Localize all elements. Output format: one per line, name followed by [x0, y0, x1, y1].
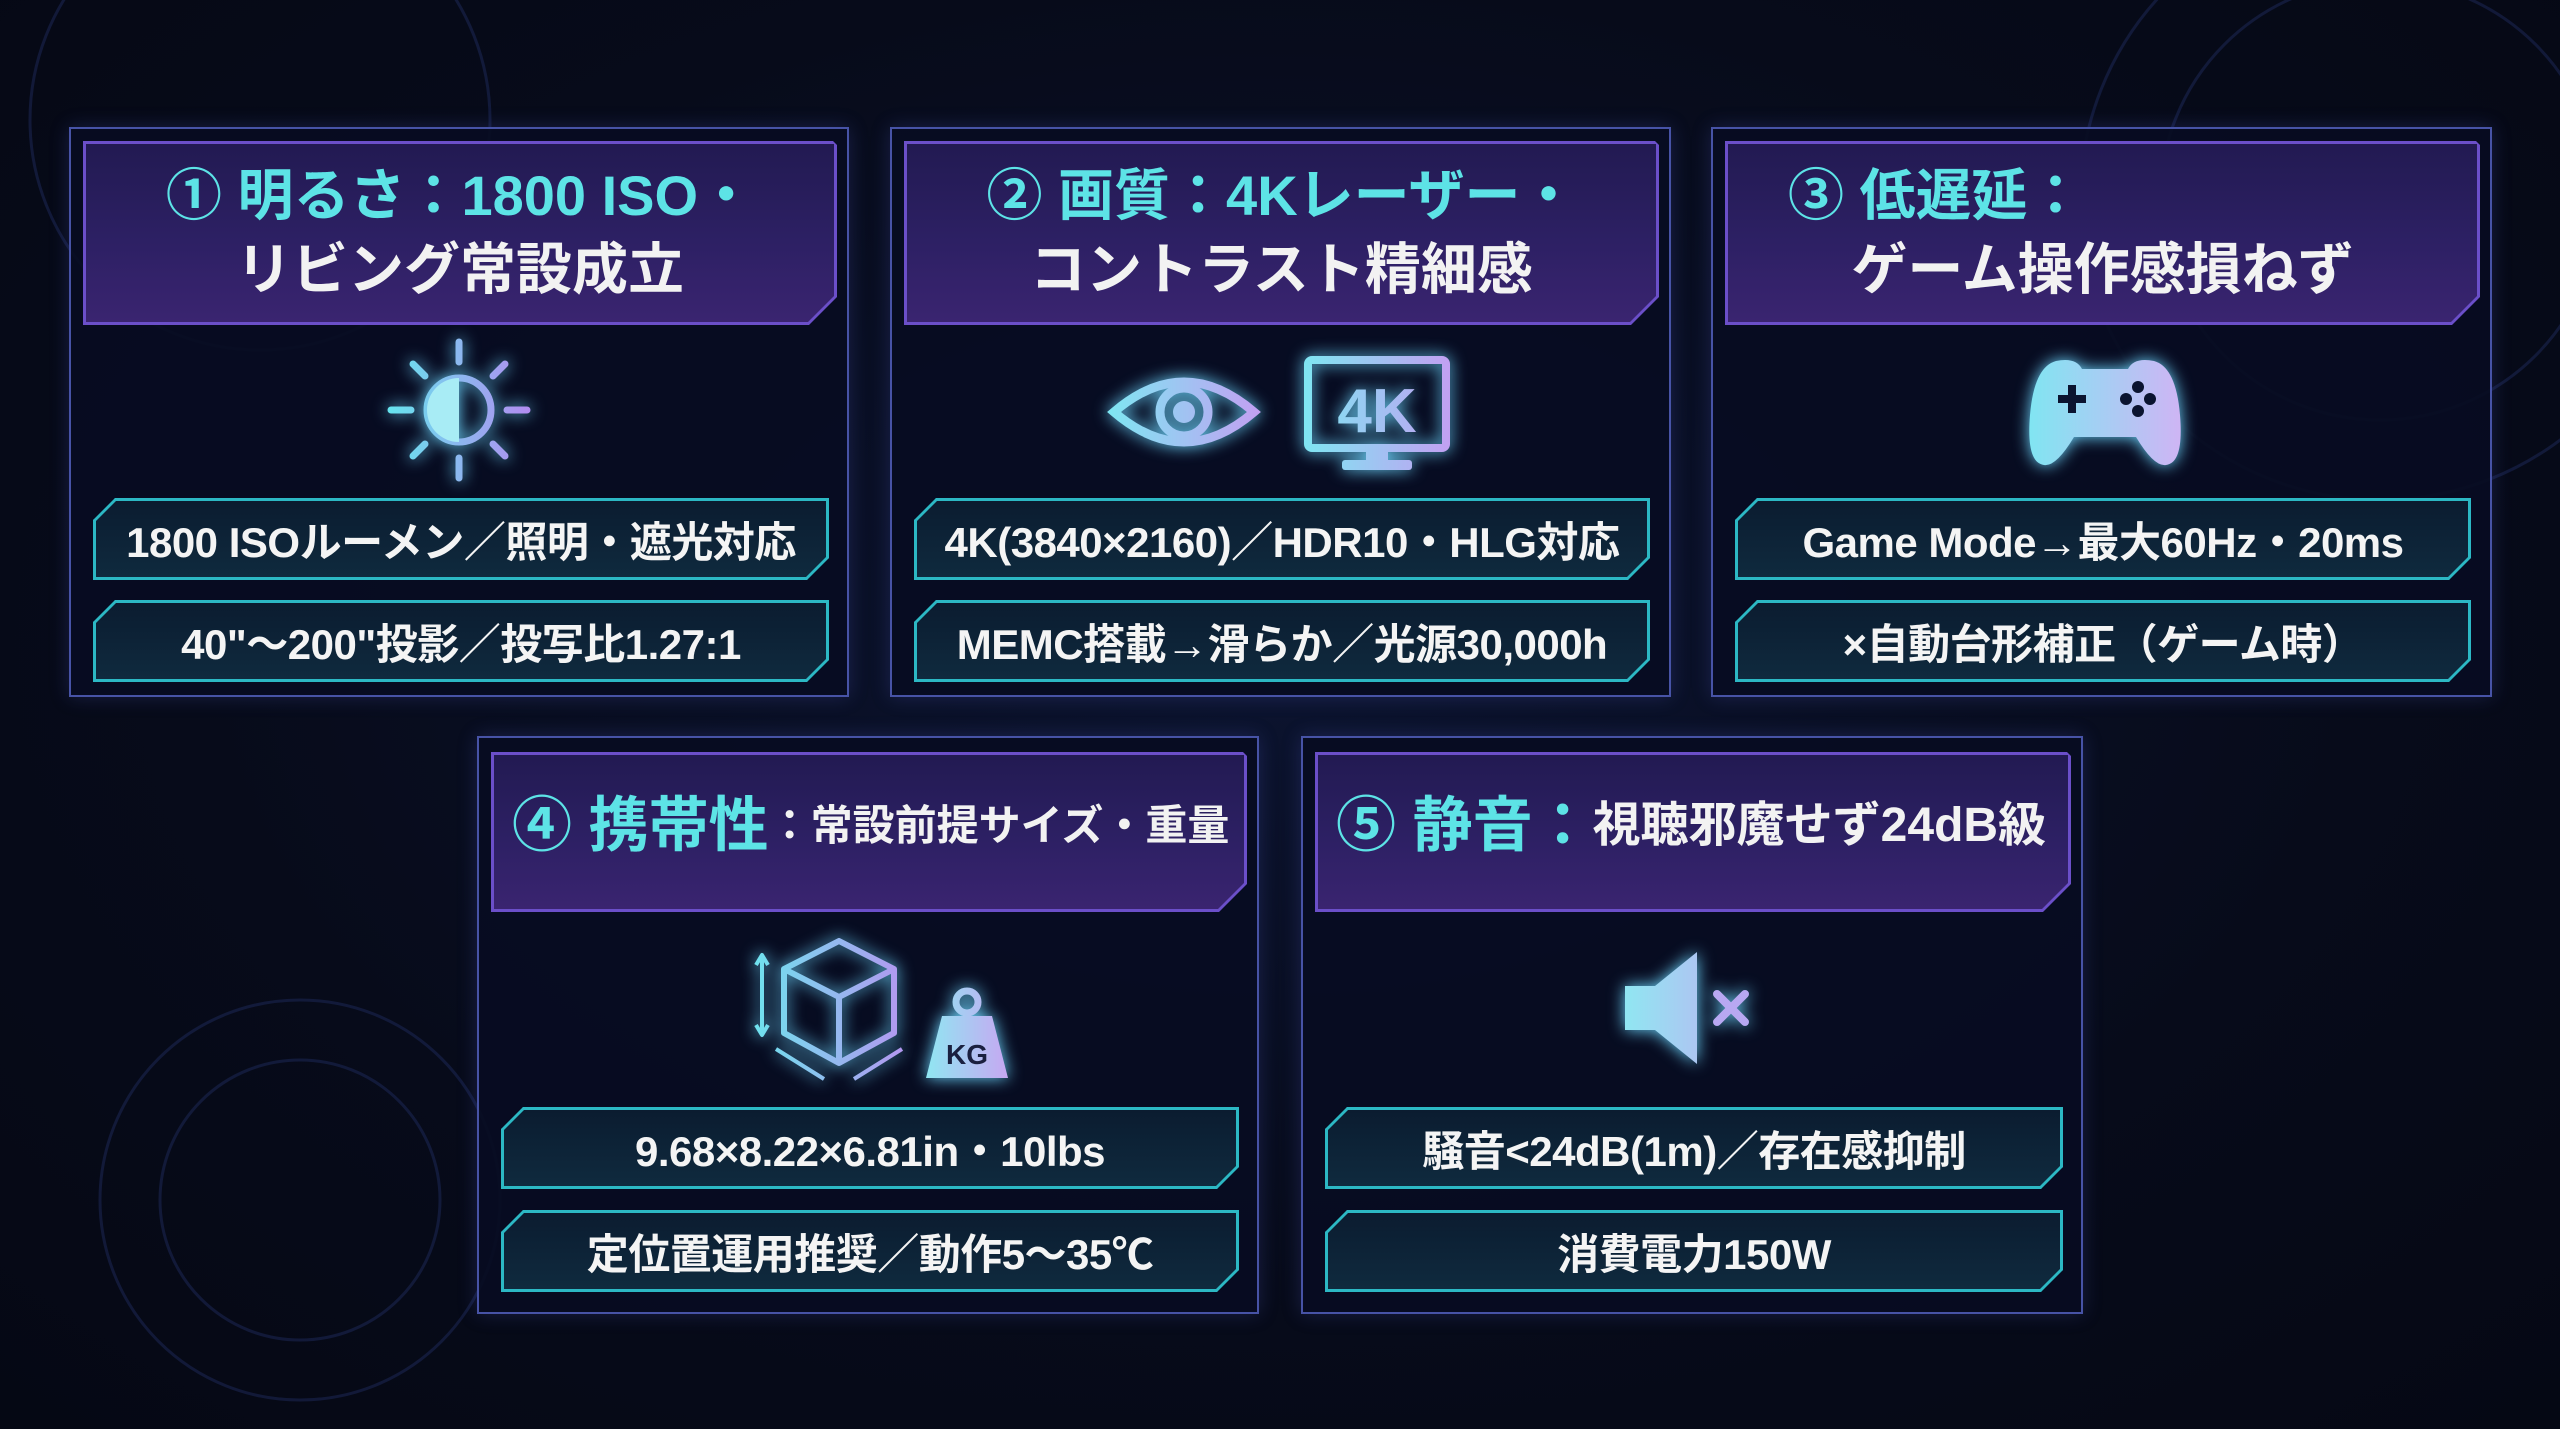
- pill: keystone: ×自動台形補正（ゲーム時）: [1843, 620, 2363, 668]
- heading: picture quality: ② 画質：4Kレーザー・: [986, 164, 1577, 227]
- pill: screen size: 40"～200"投影／投写比1.27:1: [181, 620, 741, 668]
- pill: MEMC: [914, 600, 1650, 682]
- pill: game mode: [1735, 498, 2471, 580]
- heading: picture quality: コントラスト精細感: [1030, 238, 1533, 301]
- pill: operation: [501, 1210, 1239, 1292]
- heading: picture quality: [904, 141, 1659, 325]
- pill: noise: [1325, 1107, 2063, 1189]
- heading: portability: ④ 携帯性: [512, 792, 769, 859]
- pill: lumen: 1800 ISOルーメン／照明・遮光対応: [126, 518, 796, 566]
- pill: screen size: [93, 600, 829, 682]
- panel: quietness: [1301, 736, 2083, 1314]
- heading: brightness: リビング常設成立: [236, 238, 684, 301]
- panel: brightness: [69, 127, 849, 697]
- icon: gamepad: [2016, 348, 2194, 476]
- icon: speaker mute: [1612, 945, 1758, 1071]
- heading: quietness: 視聴邪魔せず24dB級: [1593, 799, 2046, 852]
- icon: 4K monitor: 4K: [1337, 377, 1417, 446]
- heading: quietness: ⑤ 静音：: [1336, 792, 1593, 859]
- pill: game mode: Game Mode→最大60Hz・20ms: [1802, 518, 2404, 566]
- panel: picture quality: [890, 127, 1671, 697]
- pill: operation: 定位置運用推奨／動作5～35℃: [587, 1230, 1153, 1278]
- icon: sun: [379, 330, 539, 490]
- pill: power: 消費電力150W: [1557, 1230, 1831, 1278]
- pill: resolution: 4K(3840×2160)／HDR10・HLG対応: [945, 518, 1619, 566]
- icon: cube with arrows: [745, 928, 910, 1088]
- panel: portability: [477, 736, 1259, 1314]
- heading: latency: [1725, 141, 2480, 325]
- heading: brightness: [83, 141, 837, 325]
- heading: portability: ：常設前提サイズ・重量: [769, 802, 1229, 849]
- pill: noise: 騒音<24dB(1m)／存在感抑制: [1422, 1128, 1966, 1174]
- pill: dimensions: [501, 1107, 1239, 1189]
- heading: quietness: [1315, 752, 2071, 912]
- pill: dimensions: 9.68×8.22×6.81in・10lbs: [635, 1128, 1105, 1174]
- pill: lumen: [93, 498, 829, 580]
- pill: power: [1325, 1210, 2063, 1292]
- pill: keystone: [1735, 600, 2471, 682]
- icon: eye: [1099, 364, 1269, 460]
- heading: brightness: ① 明るさ：1800 ISO・: [166, 164, 754, 227]
- pill: resolution: [914, 498, 1650, 580]
- icon: 4K monitor: [1291, 343, 1463, 483]
- heading: latency: ゲーム操作感損ねず: [1851, 238, 2354, 301]
- pill: MEMC: MEMC搭載→滑らか／光源30,000h: [957, 620, 1607, 668]
- panel: latency: [1711, 127, 2492, 697]
- icon: KG weight: KG: [946, 1039, 988, 1070]
- heading: portability: [491, 752, 1247, 912]
- heading: latency: ③ 低遅延：: [1788, 164, 2084, 227]
- icon: KG weight: [916, 976, 1018, 1091]
